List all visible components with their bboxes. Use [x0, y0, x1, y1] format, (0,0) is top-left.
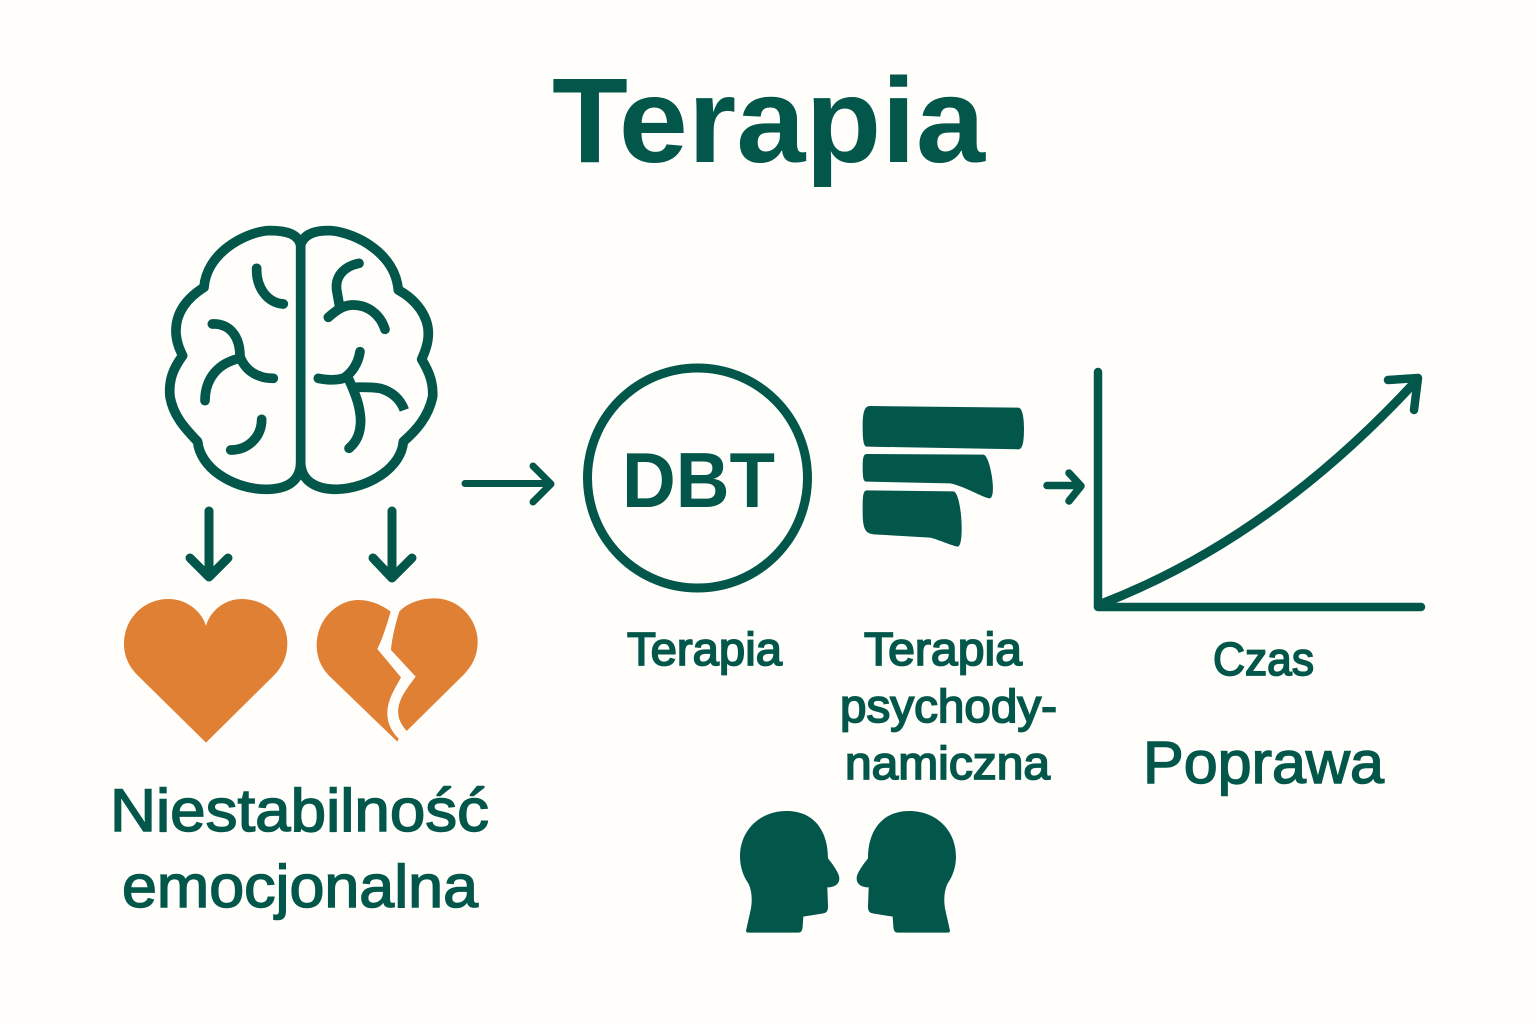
- chart: improvement over time: [1098, 372, 1421, 607]
- label: psychodynamic therapy: namiczna: [845, 737, 1050, 789]
- label: psychodynamic therapy: psychody-: [840, 680, 1057, 732]
- label: psychodynamic therapy: Terapia: [864, 623, 1022, 675]
- icon: layered blocks: [863, 406, 1024, 547]
- icon: broken heart: [317, 598, 478, 742]
- arrow: to chart: [1047, 473, 1081, 501]
- label: improvement: Poprawa: [1143, 730, 1384, 796]
- label: therapy: Terapia: [627, 623, 782, 675]
- icon: brain: [170, 231, 433, 489]
- text: emotional instability: Niestabilność: [110, 777, 489, 844]
- arrow: brain to heart: [190, 511, 228, 577]
- arrow: to therapy: [465, 466, 551, 502]
- icon: DBT circle: DBT: [622, 436, 775, 524]
- label: psychodynamic therapy: [840, 623, 1057, 789]
- text: emotional instability: emocjonalna: [122, 853, 479, 920]
- title: Terapia: [552, 52, 987, 188]
- icon: two heads facing: [740, 811, 956, 933]
- label: time: Czas: [1213, 633, 1314, 685]
- icon: DBT circle: [588, 368, 808, 588]
- text: emotional instability: [110, 777, 489, 920]
- icon: heart: [124, 599, 287, 743]
- arrow: brain to broken heart: [373, 511, 412, 578]
